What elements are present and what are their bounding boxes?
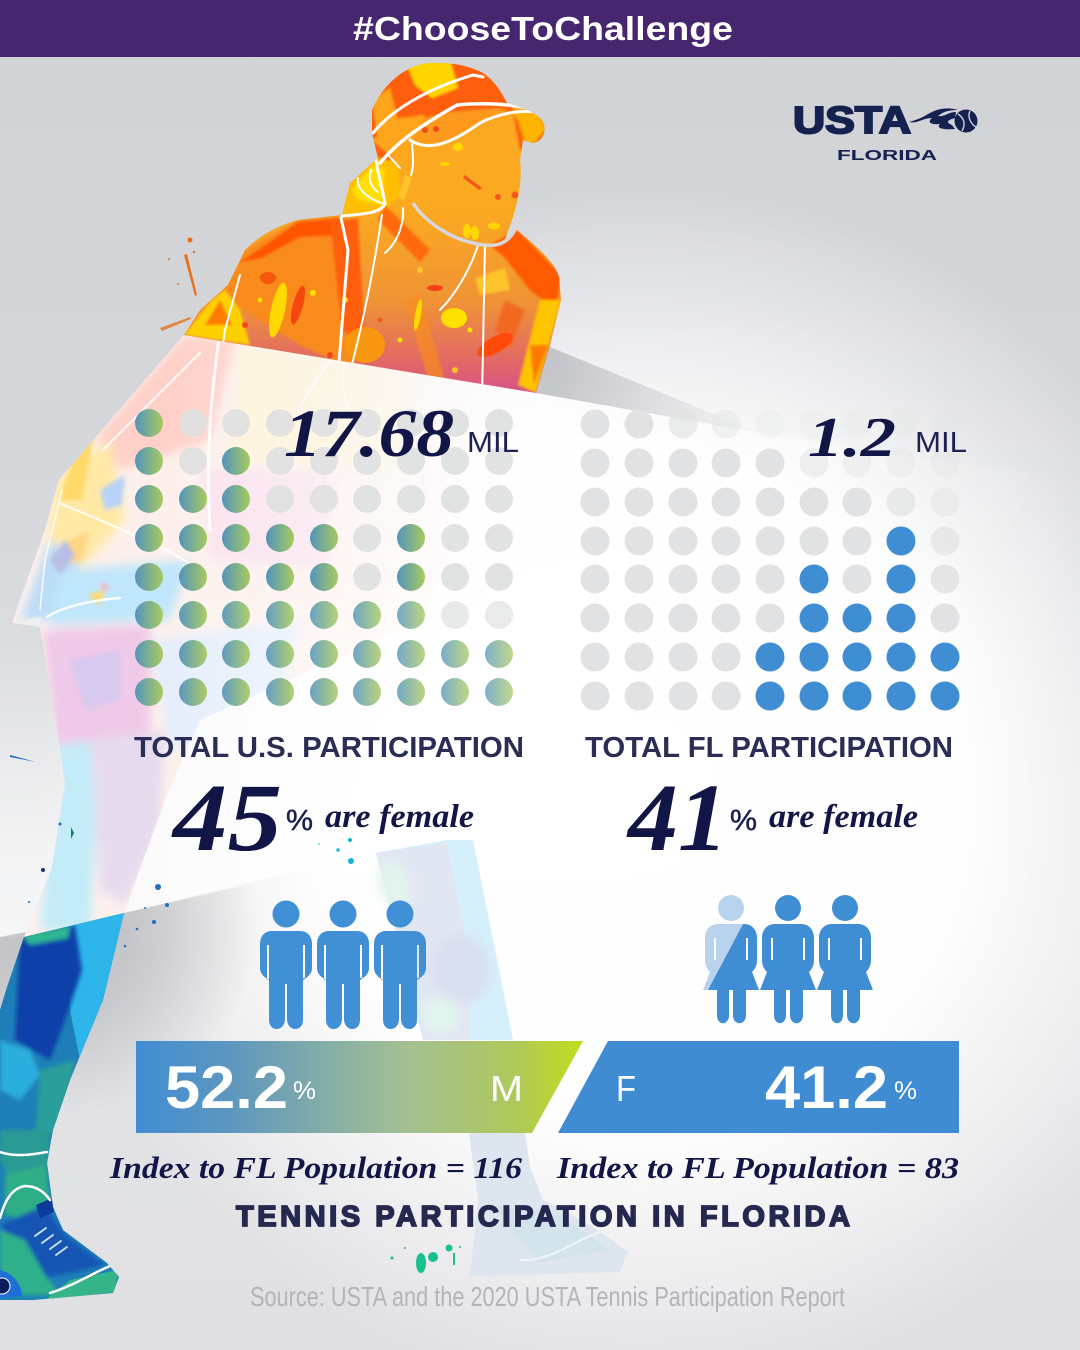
splatter — [242, 126, 518, 373]
white contour lines — [215, 75, 537, 400]
text: female index: Index to FL Population = 83 — [556, 1150, 959, 1185]
stat: 1.2 MIL — [808, 407, 967, 469]
splatter: blue dots near leg — [10, 755, 169, 947]
header title: #ChooseToChallenge — [353, 10, 733, 47]
stat: 45% are female: are female — [325, 799, 474, 835]
chin line — [413, 203, 515, 245]
logo: USTA Florida — [793, 100, 978, 164]
label: total FL participation: TOTAL FL PARTICIPATION — [585, 732, 953, 764]
stat: 41% are female: are female — [769, 799, 918, 835]
stat: 17.68 MIL — [284, 395, 519, 471]
stat: 45% are female: 45 — [171, 764, 282, 871]
splatter: cyan near label — [318, 838, 354, 864]
figure: bright upper body of tennis player — [170, 55, 570, 400]
bar: female share — [558, 1041, 959, 1133]
bar: male share: M — [490, 1068, 523, 1109]
figure: pale lower body of tennis player behind the panel — [12, 335, 415, 937]
dot chart: total U.S. participation — [130, 409, 515, 710]
bar: male share: % — [293, 1077, 316, 1105]
dot chart: total FL participation — [580, 410, 960, 710]
heading: tennis participation in Florida: TENNIS PARTICIPATION IN FLORIDA — [236, 1201, 850, 1233]
panel: white diagonal light band — [0, 335, 1080, 1120]
logo: USTA Florida: FLORIDA — [837, 147, 937, 164]
bar: male share: 52.2 — [165, 1054, 288, 1121]
figure: bright lower leg and shoe — [0, 900, 130, 1310]
figure: pale back leg and shoe — [371, 840, 628, 1276]
stat: 1.2 MIL: 1.2 — [808, 407, 896, 469]
bar: male share — [136, 1041, 583, 1133]
splatter: orange near shoulder — [160, 238, 197, 331]
bar: female share: 41.2 — [765, 1054, 888, 1121]
bar: female share: F — [616, 1068, 636, 1109]
icon: flaming tennis ball — [909, 108, 978, 132]
stat: 17.68 MIL: MIL — [467, 427, 519, 459]
stat: 45% are female: % — [286, 805, 313, 837]
splatter: teal near shoes — [390, 1244, 461, 1273]
logo: USTA Florida: USTA — [793, 100, 911, 142]
text: source: Source: USTA and the 2020 USTA Tennis Participation Report — [250, 1281, 845, 1312]
stat: 41% are female: 41 — [626, 764, 728, 871]
icon: three male figures — [260, 900, 426, 1029]
stat: 45% are female — [171, 764, 474, 871]
icon: three female figures, first partly faded — [703, 895, 873, 1023]
stat: 41% are female: % — [730, 805, 757, 837]
stat: 17.68 MIL: 17.68 — [284, 395, 454, 471]
text: male index: Index to FL Population = 116 — [109, 1150, 523, 1185]
stat: 1.2 MIL: MIL — [915, 427, 967, 459]
label: total U.S. participation: TOTAL U.S. PARTICIPATION — [134, 732, 524, 764]
header bar — [0, 0, 1080, 57]
cap and shoulder colours — [184, 58, 561, 393]
bar: female share: % — [894, 1077, 917, 1105]
stat: 41% are female — [626, 764, 918, 871]
leg paint — [70, 913, 124, 1057]
